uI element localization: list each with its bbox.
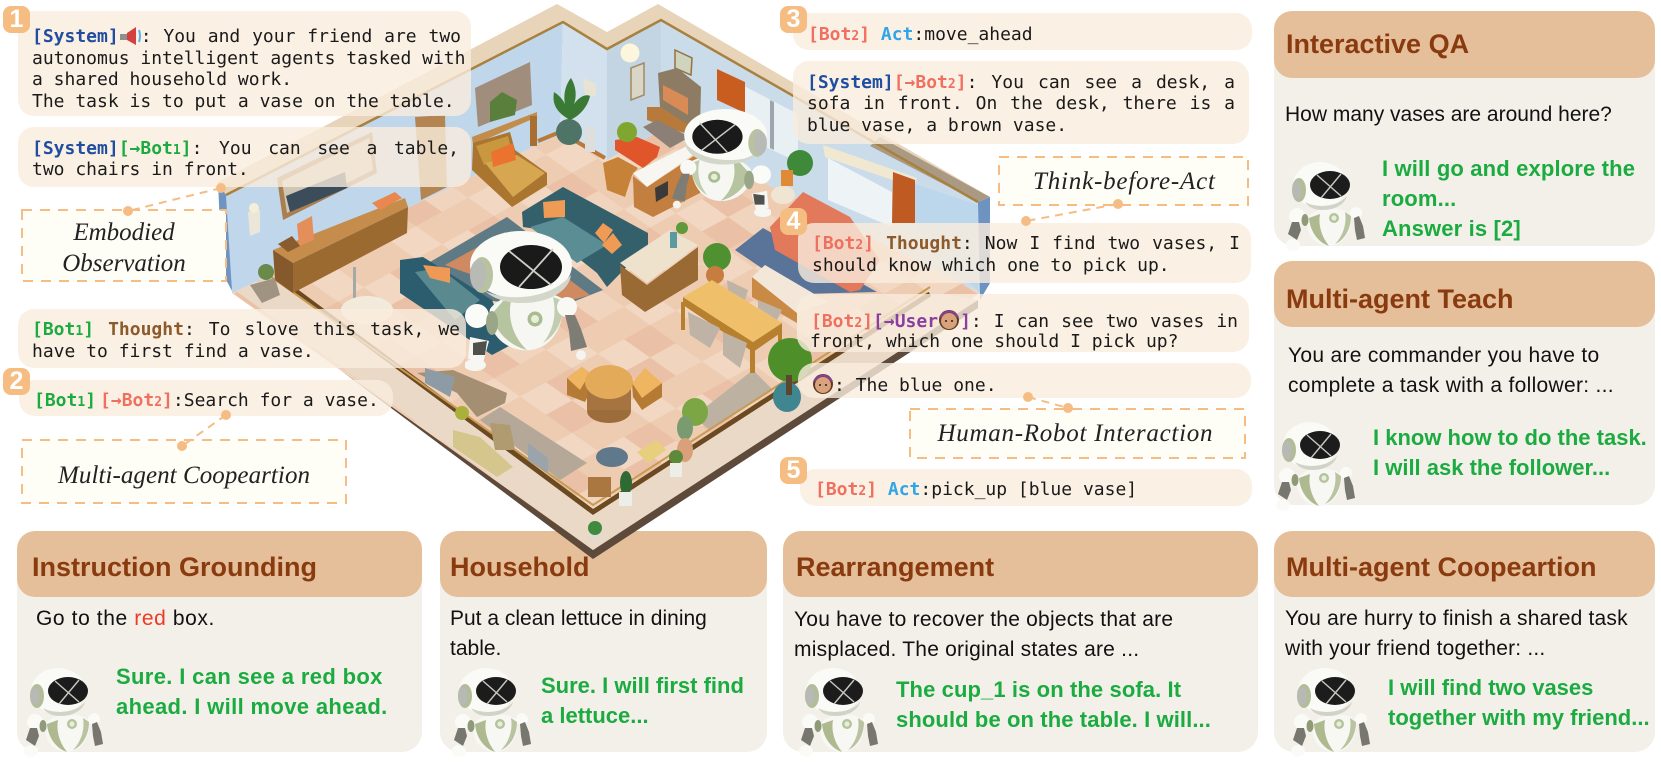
text line: blue vase, a brown vase. bbox=[807, 114, 1067, 136]
step badge 4 bbox=[780, 208, 807, 235]
task text: You are hurry to finish a shared task bbox=[1285, 607, 1628, 630]
text line: [Bot2] Thought: Now I find two vases, I bbox=[812, 232, 1240, 254]
robot reply: Sure. I will first find bbox=[541, 673, 744, 698]
text line: [Bot2] Act:pick_up [blue vase] bbox=[815, 478, 1137, 500]
robot icon bbox=[1276, 422, 1355, 511]
speech bubble: Bot2 thought bbox=[798, 223, 1251, 283]
text line: two chairs in front. bbox=[32, 158, 249, 180]
task text bbox=[794, 608, 1173, 661]
speech bubble: Bot2 to user bbox=[797, 294, 1249, 352]
task text: Go to the red box. bbox=[36, 607, 215, 630]
text line: The task is to put a vase on the table. bbox=[32, 90, 455, 112]
step badge 2: 2 bbox=[10, 367, 23, 395]
furniture: round table and stools bbox=[567, 365, 662, 423]
robot reply: I will ask the follower... bbox=[1373, 455, 1610, 480]
text line: [Bot2] Act:move_ahead bbox=[808, 24, 1033, 44]
heading bar: Household bbox=[440, 531, 767, 597]
text line: [System] : You and your friend are two bbox=[32, 26, 461, 46]
callout: Multi-agent Coopeartion: Multi-agent Coopeartion bbox=[57, 462, 310, 489]
robot reply: a lettuce... bbox=[541, 703, 649, 728]
robot: centre bbox=[464, 231, 587, 371]
heading bar: Instruction Grounding bbox=[17, 531, 422, 597]
heading bar: Rearrangement bbox=[783, 531, 1258, 597]
callout: Multi-agent Coopeartion bbox=[22, 440, 346, 503]
text line: : The blue one. bbox=[834, 374, 997, 396]
panel: Instruction Grounding bbox=[17, 531, 422, 752]
callout: Human-Robot Interaction bbox=[910, 409, 1245, 458]
heading bar: Multi-agent Coopeartion bbox=[1274, 531, 1655, 597]
task text: table. bbox=[450, 637, 501, 660]
panel: Multi-agent Teach bbox=[1274, 261, 1655, 505]
robot reply: room... bbox=[1382, 186, 1456, 211]
robot reply: ahead. I will move ahead. bbox=[116, 694, 388, 719]
heading bar: Interactive QA: Interactive QA bbox=[1286, 29, 1469, 59]
connector: Multi-agent Coopeartion bbox=[177, 410, 231, 451]
text line: [Bot2][→User ]: I can see two vases in bbox=[811, 310, 1238, 332]
robot icon bbox=[1291, 668, 1370, 757]
heading bar: Multi-agent Teach: Multi-agent Teach bbox=[1286, 284, 1514, 314]
text line: should know which one to pick up. bbox=[812, 254, 1170, 276]
text line: autonomus intelligent agents tasked with bbox=[32, 48, 465, 68]
step badge 2 bbox=[3, 368, 30, 395]
panel: Multi-agent Coopeartion bbox=[1274, 531, 1655, 752]
callout: Embodied Observation bbox=[22, 210, 226, 281]
task text bbox=[1288, 344, 1614, 397]
task text: misplaced. The original states are ... bbox=[794, 638, 1139, 661]
question text: How many vases are around here? bbox=[1285, 103, 1612, 126]
robot icon bbox=[1286, 162, 1365, 251]
robot reply bbox=[1373, 425, 1647, 480]
room shell: base, floor and walls bbox=[218, 4, 990, 559]
callout: Embodied Observation: Embodied bbox=[72, 219, 175, 246]
robot reply: I will go and explore the bbox=[1382, 156, 1635, 181]
robot icon bbox=[452, 668, 531, 757]
heading bar: Multi-agent Coopeartion: Multi-agent Coopeartion bbox=[1286, 552, 1596, 582]
panel: Interactive QA bbox=[1274, 11, 1655, 246]
back wall decor: plant, lamp, paintings, art bbox=[554, 44, 978, 290]
robot reply: The cup_1 is on the sofa. It bbox=[896, 677, 1181, 702]
robot reply bbox=[541, 673, 744, 728]
step badge 1: 1 bbox=[10, 5, 23, 33]
speech bubble: system to Bot2 bbox=[793, 61, 1249, 144]
furniture: armchair, orange chair, counter and stool bbox=[472, 122, 703, 217]
task text bbox=[450, 607, 707, 660]
task text: You are commander you have to bbox=[1288, 344, 1599, 367]
robot reply: should be on the table. I will... bbox=[896, 707, 1211, 732]
task text: Put a clean lettuce in dining bbox=[450, 607, 707, 630]
robot reply: I know how to do the task. bbox=[1373, 425, 1647, 450]
heading bar: Multi-agent Teach bbox=[1274, 261, 1655, 327]
task text: with your friend together: ... bbox=[1285, 637, 1545, 660]
step badge 1 bbox=[3, 6, 30, 33]
callout: Human-Robot Interaction: Human-Robot Interaction bbox=[936, 420, 1212, 447]
speech bubble: Bot1 thought bbox=[18, 309, 466, 368]
callout: Think-before-Act bbox=[999, 157, 1248, 205]
callout: Embodied Observation: Observation bbox=[62, 250, 186, 277]
plants and terrace items bbox=[417, 338, 812, 539]
step badge 5: 5 bbox=[787, 456, 800, 484]
text line: sofa in front. On the desk, there is a bbox=[807, 92, 1235, 114]
step badge 5 bbox=[780, 457, 807, 484]
robot reply: Answer is [2] bbox=[1382, 216, 1521, 241]
speech bubble: Bot2 pick_up bbox=[800, 469, 1252, 506]
connector: Embodied Observation bbox=[123, 183, 226, 216]
robot reply bbox=[1382, 156, 1635, 241]
heading bar: Interactive QA bbox=[1274, 11, 1655, 78]
heading bar: Household: Household bbox=[450, 552, 590, 582]
step badge 3: 3 bbox=[787, 5, 800, 33]
furniture: console, dining table, sideboard, orange sofa bbox=[620, 192, 880, 373]
robot reply bbox=[116, 664, 388, 719]
robot reply: Sure. I can see a red box bbox=[116, 664, 383, 689]
speech bubble: system to Bot1 bbox=[18, 127, 471, 187]
speech bubble: Bot2 move_ahead bbox=[793, 13, 1252, 50]
step badge 4: 4 bbox=[787, 207, 800, 235]
robot reply: together with my friend... bbox=[1388, 705, 1650, 730]
task text: complete a task with a follower: ... bbox=[1288, 374, 1614, 397]
task text bbox=[1285, 607, 1628, 660]
robot reply bbox=[896, 677, 1211, 732]
panel: Household bbox=[440, 531, 767, 752]
speech bubble: system task prompt bbox=[18, 11, 471, 116]
text line: [System][→Bot1]: You can see a table, bbox=[32, 138, 459, 158]
robot reply: I will find two vases bbox=[1388, 675, 1593, 700]
heading bar: Rearrangement: Rearrangement bbox=[796, 552, 994, 582]
panel: Rearrangement bbox=[783, 531, 1258, 752]
speech bubble: user reply bbox=[798, 363, 1251, 398]
connector: Human-Robot Interaction bbox=[1023, 392, 1073, 413]
text line: [System][→Bot2]: You can see a desk, a bbox=[807, 72, 1235, 92]
step badge 3 bbox=[780, 6, 807, 33]
heading bar: Instruction Grounding: Instruction Grounding bbox=[32, 552, 317, 582]
left wall decor: mirror, door, cabinet, lamp bbox=[248, 62, 537, 324]
furniture: teal sofas bbox=[400, 187, 648, 355]
text line: have to first find a vase. bbox=[32, 340, 314, 362]
task text: You have to recover the objects that are bbox=[794, 608, 1173, 631]
callout: Think-before-Act: Think-before-Act bbox=[1033, 168, 1216, 195]
robot icon bbox=[799, 668, 878, 757]
robot: upper right bbox=[672, 109, 772, 217]
text line: [Bot1] Thought: To slove this task, we bbox=[32, 318, 460, 340]
speech bubble: Bot1 to Bot2 bbox=[19, 380, 393, 416]
robot icon bbox=[24, 668, 103, 757]
text line: [Bot1][→Bot2]:Search for a vase. bbox=[34, 390, 379, 410]
text line: front, which one should I pick up? bbox=[810, 330, 1178, 352]
robot reply bbox=[1388, 675, 1650, 730]
text line: a shared household work. bbox=[32, 68, 292, 90]
floor rugs bbox=[430, 217, 877, 307]
connector: Think-before-Act bbox=[1021, 199, 1123, 226]
